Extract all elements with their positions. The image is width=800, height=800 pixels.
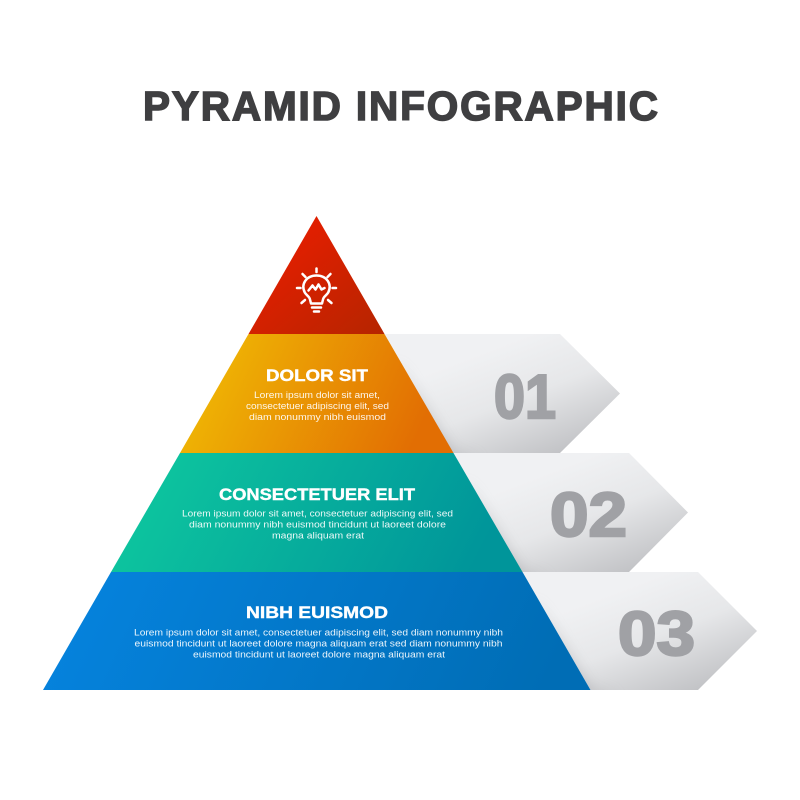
pyramid tier: orange, dolor sit	[180, 334, 454, 453]
pyramid tier: blue, nibh euismod	[43, 572, 590, 690]
heading: nibh euismod: NIBH EUISMOD	[246, 603, 388, 622]
arrow tab 02	[453, 453, 688, 579]
icon: light bulb	[297, 268, 336, 312]
text block: consectetuer elit: diam nonummy nibh euismod tincidunt ut laoreet dolore	[189, 520, 446, 530]
number 03: 03	[618, 600, 695, 669]
text block: dolor sit: consectetuer adipiscing elit, sed	[246, 401, 389, 412]
text block: nibh euismod: euismod tincidunt ut laoreet dolore magna aliquam erat sed diam nonummy nibh	[134, 638, 502, 650]
text block: consectetuer elit: magna aliquam erat	[272, 530, 364, 542]
text block: consectetuer elit	[182, 508, 453, 542]
text block: nibh euismod: Lorem ipsum dolor sit amet, consectetuer adipiscing elit, sed diam nonummy nibh	[134, 628, 503, 638]
text block: dolor sit: Lorem ipsum dolor sit amet,	[254, 390, 380, 401]
text block: consectetuer elit: Lorem ipsum dolor sit amet, consectetuer adipiscing elit, sed	[182, 508, 453, 520]
pyramid tier: teal, consectetuer elit	[111, 453, 522, 572]
heading: dolor sit: DOLOR SIT	[266, 366, 369, 385]
pyramid tier: red top with icon	[248, 216, 384, 334]
arrow tab 03	[522, 572, 757, 697]
number 02: 02	[550, 481, 627, 550]
text block: dolor sit: diam nonummy nibh euismod	[249, 412, 386, 423]
number 01: 01	[494, 363, 556, 432]
title: PYRAMID INFOGRAPHIC	[143, 83, 658, 129]
text block: nibh euismod	[134, 628, 503, 660]
text block: dolor sit	[246, 390, 389, 423]
heading: consectetuer elit: CONSECTETUER ELIT	[219, 485, 416, 504]
arrow tab 01	[384, 334, 620, 460]
text block: nibh euismod: euismod tincidunt ut laoreet dolore magna aliquam erat	[193, 650, 445, 660]
